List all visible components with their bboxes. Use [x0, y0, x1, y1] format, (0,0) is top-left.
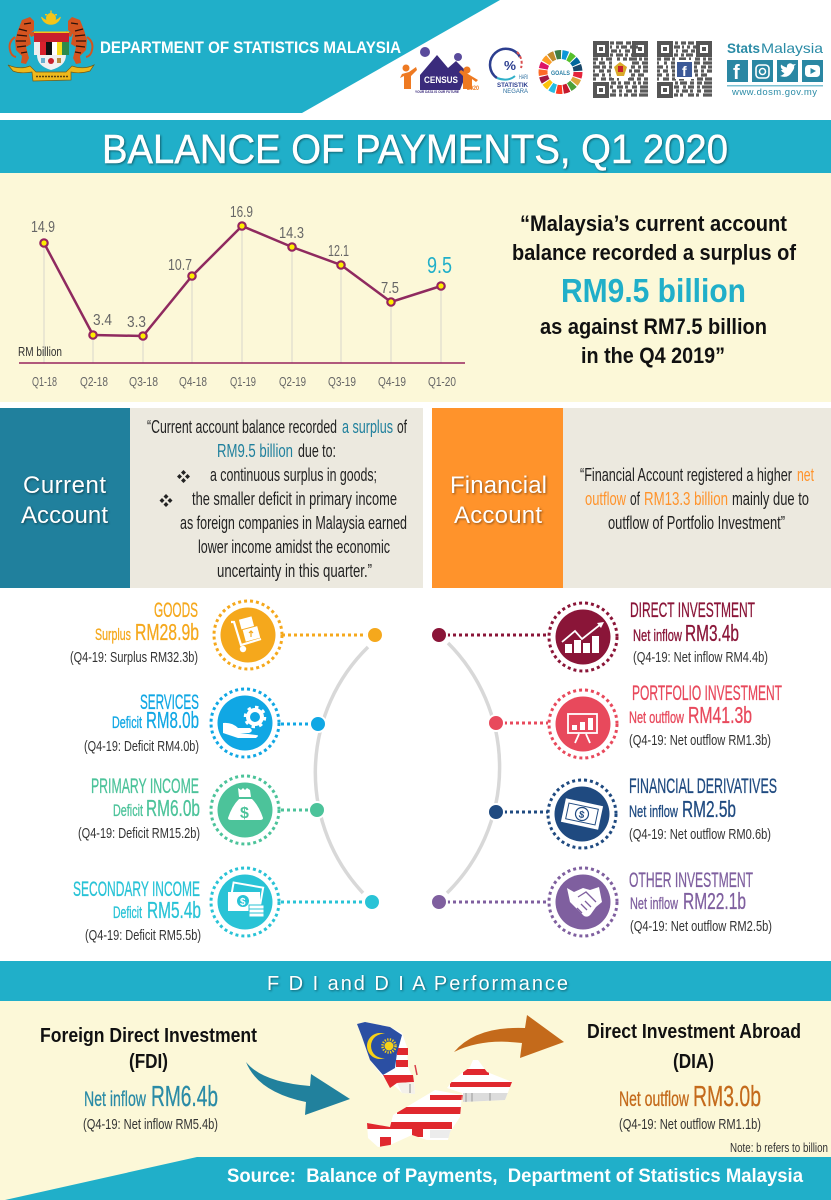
- line chart: 14.3: [279, 225, 304, 242]
- DIA text: Net outflow: [619, 1088, 690, 1111]
- QR code: portal: [593, 41, 648, 98]
- panel: financial account: Account: [454, 502, 542, 529]
- item: secondary income: SECONDARY INCOME: [73, 878, 200, 901]
- logo: hari statistik negara: HARI: [519, 75, 528, 81]
- panel: current account: [0, 408, 423, 588]
- item: primary income: $: [240, 805, 249, 822]
- item: goods: GOODS: [154, 599, 198, 622]
- item: secondary income: $: [240, 897, 246, 908]
- item: primary income: RM6.0b: [146, 795, 200, 821]
- current account text: the smaller deficit in primary income: [192, 489, 397, 509]
- social media block: Malaysia: [761, 40, 823, 56]
- logo: hari statistik negara: %: [504, 58, 516, 73]
- social media block: [727, 40, 823, 98]
- line chart: Q4-19: [378, 374, 406, 389]
- item: other investment: (Q4-19: Net outflow RM2.5b): [630, 919, 772, 935]
- logo: sustainable development goals wheel: [536, 47, 585, 97]
- logo: hari statistik negara: [490, 49, 528, 95]
- item: other investment: RM22.1b: [683, 888, 746, 914]
- DIA text: Direct Investment Abroad: [587, 1021, 801, 1043]
- logo: census 2020: YOUR DATA IS OUR FUTURE: [415, 89, 459, 94]
- FDI text: (FDI): [129, 1051, 168, 1073]
- line chart: RM billion: [18, 344, 62, 359]
- source band: Source: Balance of Payments, Department of Statistics Malaysia: [227, 1166, 803, 1187]
- map: peninsular Malaysia: [357, 1022, 417, 1094]
- item: other investment: Net inflow: [630, 895, 678, 913]
- QR code: facebook: f: [682, 63, 687, 79]
- panel: financial account: Financial: [450, 472, 547, 499]
- current account text: a continuous surplus in goods;: [210, 465, 377, 485]
- headline quote: RM9.5 billion: [561, 272, 746, 309]
- item: financial derivatives: (Q4-19: Net outflow RM0.6b): [629, 827, 771, 843]
- item: other investment: [431, 868, 772, 936]
- panel: current account: Account: [21, 502, 108, 529]
- social media block: www.dosm.gov.my: [731, 87, 817, 98]
- panel: financial account: [432, 408, 831, 588]
- financial account text: outflow: [585, 489, 627, 509]
- headline quote: [512, 211, 797, 368]
- line chart: [18, 204, 465, 389]
- connector arcs: [315, 643, 500, 893]
- icon: youtube: [802, 60, 823, 82]
- item: portfolio investment: RM41.3b: [688, 702, 752, 728]
- line chart: 7.5: [381, 280, 399, 297]
- line chart: 12.1: [328, 243, 349, 260]
- FDI text: Net inflow: [84, 1088, 147, 1111]
- item: services: RM8.0b: [146, 707, 199, 733]
- map: Sabah and Sarawak: [367, 1060, 512, 1147]
- logo: census 2020: CENSUS: [424, 75, 458, 85]
- current account text: a surplus: [342, 417, 393, 437]
- line chart: Q4-18: [179, 374, 207, 389]
- item: primary income: Deficit: [113, 802, 143, 820]
- financial account text: net: [797, 465, 814, 485]
- financial account text: of: [630, 489, 641, 509]
- line chart: 3.4: [93, 312, 112, 329]
- item: portfolio investment: (Q4-19: Net outflow RM1.3b): [629, 733, 771, 749]
- tigers: [10, 17, 92, 64]
- headline quote: in the Q4 2019”: [581, 343, 725, 368]
- current account text: of: [397, 417, 408, 437]
- item: financial derivatives: Net inflow: [629, 803, 678, 821]
- DIA text: [587, 1021, 801, 1133]
- item: portfolio investment: [488, 682, 782, 758]
- FDI text: (Q4-19: Net inflow RM5.4b): [83, 1117, 218, 1133]
- line chart: Q3-18: [129, 374, 158, 389]
- FDI text: RM6.4b: [151, 1081, 218, 1113]
- item: primary income: [78, 775, 325, 844]
- item: goods: (Q4-19: Surplus RM32.3b): [70, 650, 198, 666]
- line chart: Q2-18: [80, 374, 108, 389]
- DIA text: (DIA): [673, 1051, 714, 1073]
- item: goods: [70, 599, 383, 669]
- panel: current account balance: [0, 173, 831, 402]
- item: financial derivatives: RM2.5b: [682, 796, 736, 822]
- current account text: due to:: [298, 441, 336, 461]
- line chart: Q1-19: [230, 374, 256, 389]
- logo: census 2020: [400, 47, 480, 94]
- item: goods: Surplus: [95, 626, 131, 644]
- FDI text: [40, 1025, 257, 1133]
- item: financial derivatives: [488, 775, 777, 848]
- line chart: Q3-19: [328, 374, 356, 389]
- section band: FDI and DIA performance: F D I and D I A Performance: [267, 973, 568, 995]
- social media block: Stats: [727, 40, 760, 56]
- FDI text: Foreign Direct Investment: [40, 1025, 257, 1047]
- department name: DEPARTMENT OF STATISTICS MALAYSIA: [100, 39, 401, 57]
- icon: instagram: [752, 60, 773, 82]
- item: services: (Q4-19: Deficit RM4.0b): [84, 739, 199, 755]
- source band: [5, 1157, 831, 1200]
- icon: twitter: [777, 60, 798, 82]
- map: Malaysia flag: [357, 1022, 520, 1150]
- line chart: Q2-19: [279, 374, 306, 389]
- item: secondary income: Deficit: [113, 904, 142, 922]
- QR code: facebook: [657, 41, 712, 98]
- current account text: “Current account balance recorded: [147, 417, 337, 437]
- financial account text: RM13.3 billion: [644, 489, 728, 509]
- logo: hari statistik negara: NEGARA: [503, 89, 528, 95]
- shield: [34, 32, 69, 70]
- current account text: RM9.5 billion: [217, 441, 293, 461]
- current account text: uncertainty in this quarter.”: [217, 561, 372, 581]
- financial account text: [580, 465, 814, 533]
- headline quote: as against RM7.5 billion: [540, 314, 767, 339]
- item: direct investment: Net inflow: [633, 627, 682, 645]
- line chart: Q1-18: [32, 374, 57, 389]
- item: services: Deficit: [112, 714, 142, 732]
- DIA text: (Q4-19: Net outflow RM1.1b): [619, 1117, 761, 1133]
- item: services: [84, 689, 326, 757]
- item: secondary income: RM5.4b: [147, 897, 201, 923]
- item: secondary income: [73, 868, 380, 944]
- panel: FDI and DIA: [0, 1001, 831, 1200]
- headline quote: “Malaysia’s current account: [520, 211, 788, 236]
- line chart: 10.7: [168, 257, 192, 274]
- item: financial derivatives: $: [578, 809, 586, 821]
- DIA text: RM3.0b: [693, 1081, 761, 1113]
- line chart: Q1-20: [428, 374, 456, 389]
- arrow: inflow: [246, 1062, 350, 1115]
- item: goods: RM28.9b: [135, 619, 199, 645]
- line chart: 14.9: [31, 219, 55, 236]
- section band: FDI and DIA performance: [0, 961, 831, 1001]
- title band: BALANCE OF PAYMENTS, Q1 2020: [102, 126, 728, 172]
- logo: hari statistik negara: STATISTIK: [497, 82, 528, 89]
- item: secondary income: (Q4-19: Deficit RM5.5b): [85, 928, 201, 944]
- current account text: as foreign companies in Malaysia earned: [180, 513, 407, 533]
- arrow: outflow: [454, 1015, 564, 1058]
- line chart: 16.9: [230, 204, 253, 221]
- header band: [0, 0, 500, 113]
- current account text: lower income amidst the economic: [198, 537, 390, 557]
- headline quote: balance recorded a surplus of: [512, 240, 797, 265]
- line chart: 3.3: [127, 314, 146, 331]
- item: direct investment: [431, 599, 768, 671]
- icon: facebook: f: [733, 62, 740, 84]
- logo: census 2020: 2020: [467, 86, 480, 92]
- logo: sustainable development goals wheel: GOALS: [551, 71, 570, 77]
- item: direct investment: (Q4-19: Net inflow RM4.4b): [633, 650, 768, 666]
- item: primary income: (Q4-19: Deficit RM15.2b): [78, 826, 200, 842]
- item: primary income: PRIMARY INCOME: [91, 775, 199, 798]
- current account text: [147, 417, 408, 581]
- item: direct investment: RM3.4b: [685, 620, 739, 646]
- icon: national crest: [8, 10, 94, 81]
- panel: current account: Current: [23, 472, 106, 499]
- line chart: 9.5: [427, 252, 452, 278]
- item: portfolio investment: Net outflow: [629, 709, 684, 727]
- item: services: SERVICES: [140, 691, 199, 714]
